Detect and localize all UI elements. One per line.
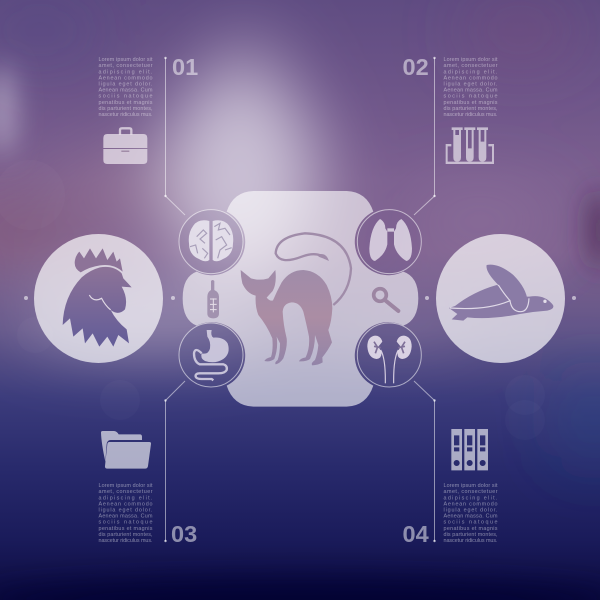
text block 04: penatibus et magnis (444, 526, 498, 532)
text block 03: Lorem ipsum dolor sit (98, 483, 153, 489)
icon: cat (241, 233, 351, 365)
side dots (24, 296, 576, 300)
icon: turtle (449, 265, 553, 321)
panel: central cat shape (183, 191, 418, 407)
connector line 03 (164, 381, 185, 542)
text block 04: Lorem ipsum dolor sit (444, 483, 498, 489)
text block 02: sociis natoque (444, 94, 498, 100)
connector line 02 (414, 57, 436, 215)
text block 02: Aenean massa. Cum (444, 88, 498, 94)
text block 04: sociis natoque (444, 520, 498, 526)
panel: kidneys circle (357, 323, 421, 387)
panel: lungs circle (357, 210, 421, 274)
text block 04 (444, 483, 498, 544)
icon: test tubes (446, 127, 494, 164)
text block 04: adipiscing elit. (444, 495, 498, 501)
text block 01: nascetur ridiculus mus. (98, 112, 152, 118)
text block 03: Aenean massa. Cum (98, 514, 153, 520)
text block 03 (98, 483, 153, 544)
icon: thermometer (207, 280, 219, 318)
connector line 01 (164, 57, 185, 215)
text block 02: nascetur ridiculus mus. (444, 112, 498, 118)
text block 01: ligula eget dolor. (98, 82, 152, 88)
panel: stomach circle (179, 323, 243, 387)
icon: lungs (369, 219, 412, 261)
text block 04: ligula eget dolor. (444, 508, 498, 514)
panel: brain circle (179, 210, 243, 274)
text block 03: dis parturient montes, (98, 532, 153, 538)
text block 01: Aenean massa. Cum (98, 88, 153, 94)
text block 02: adipiscing elit. (444, 69, 498, 75)
text block 01: dis parturient montes, (98, 106, 153, 112)
text block 01: Lorem ipsum dolor sit (98, 57, 153, 63)
number 02: 02 (402, 54, 429, 80)
text block 01: adipiscing elit. (98, 69, 152, 75)
text block 03: penatibus et magnis (98, 526, 153, 532)
icon: stomach and intestines (194, 330, 229, 380)
text block 04: Aenean commodo (444, 501, 498, 507)
icon: binders (451, 429, 488, 470)
icon: briefcase (103, 128, 147, 164)
icon: brain (189, 220, 233, 261)
text block 02: Lorem ipsum dolor sit (444, 57, 498, 63)
icon: magnifier (374, 289, 398, 311)
text block 03: ligula eget dolor. (98, 508, 152, 514)
text block 04: Aenean massa. Cum (444, 514, 498, 520)
text block 02: amet, consectetuer (444, 63, 498, 69)
text block 02: penatibus et magnis (444, 100, 498, 106)
text block 01: amet, consectetuer (98, 63, 153, 69)
number 01: 01 (172, 54, 198, 80)
text block 03: sociis natoque (98, 520, 152, 526)
text block 02 (444, 57, 498, 118)
panel: turtle circle (436, 234, 565, 363)
text block 04: amet, consectetuer (444, 489, 498, 495)
icon: kidneys (367, 336, 412, 383)
connector line 04 (414, 381, 436, 542)
text block 02: Aenean commodo (444, 75, 498, 81)
text block 01: sociis natoque (98, 94, 152, 100)
text block 01 (98, 57, 153, 118)
icon: folder (101, 431, 151, 469)
text block 03: amet, consectetuer (98, 489, 153, 495)
text block 03: nascetur ridiculus mus. (98, 538, 152, 544)
icon: rooster (63, 248, 132, 347)
text block 04: dis parturient montes, (444, 532, 498, 538)
text block 01: penatibus et magnis (98, 100, 153, 106)
text block 01: Aenean commodo (98, 75, 152, 81)
panel: rooster circle (34, 234, 163, 363)
number 03: 03 (171, 521, 197, 547)
text block 04: nascetur ridiculus mus. (444, 538, 498, 544)
number 04: 04 (402, 521, 429, 547)
text block 02: dis parturient montes, (444, 106, 498, 112)
text block 03: Aenean commodo (98, 501, 152, 507)
text block 02: ligula eget dolor. (444, 82, 498, 88)
text block 03: adipiscing elit. (98, 495, 152, 501)
